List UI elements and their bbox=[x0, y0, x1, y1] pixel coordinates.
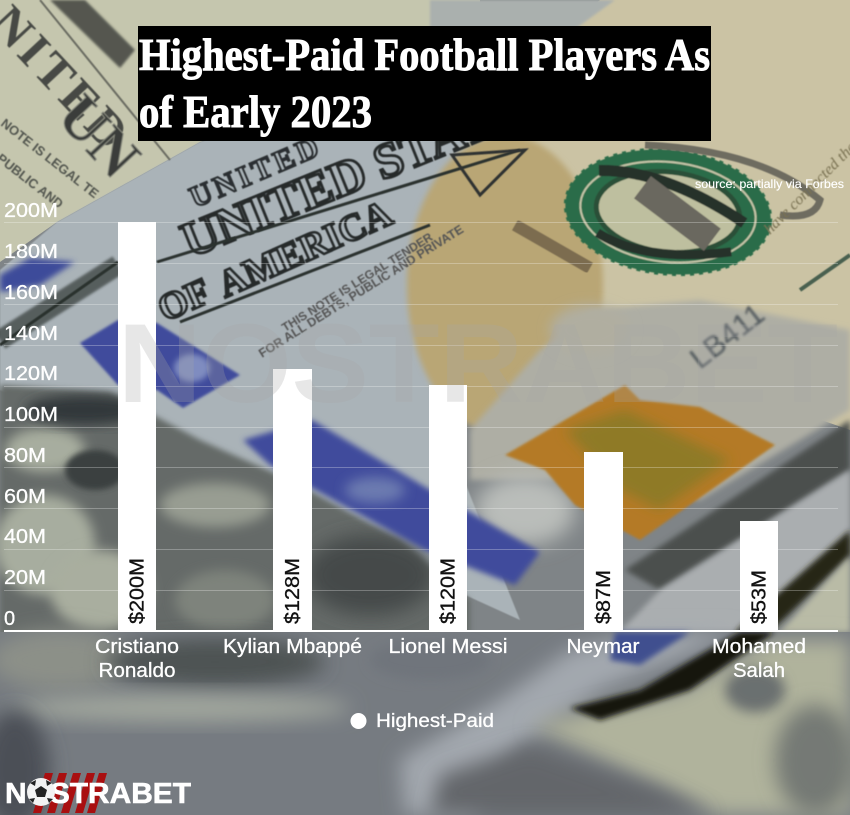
bar: Lionel Messi bbox=[429, 385, 467, 630]
mottled note right bbox=[470, 300, 850, 500]
logo red stripes bbox=[33, 773, 107, 813]
bar: Neymar bbox=[584, 452, 623, 630]
y-axis labels: 60M bbox=[4, 486, 46, 508]
bar: Lionel Messi: $120M bbox=[438, 558, 460, 624]
portrait area bbox=[0, 385, 470, 640]
grid lines bbox=[4, 222, 838, 590]
x-axis labels: Ronaldo bbox=[98, 660, 176, 682]
bar: Kylian Mbappé: $128M bbox=[282, 558, 304, 624]
orange diamond bbox=[505, 385, 775, 540]
logo: NOSTRABET: NOSTRABET bbox=[5, 778, 191, 810]
logo football icon bbox=[27, 778, 55, 806]
green treasury seal bbox=[559, 140, 777, 284]
background: blurred banknotes photo: LB411 bbox=[684, 297, 771, 376]
bar: Cristiano Ronaldo bbox=[118, 222, 156, 630]
title block: of Early 2023 bbox=[139, 87, 372, 137]
watermark: faint NOSTRABET: NOSTRABET bbox=[118, 301, 838, 426]
note lettering centre: THIS NOTE IS LEGAL TENDER bbox=[279, 230, 435, 335]
bar: Mohamed Salah bbox=[740, 521, 778, 630]
note lettering top left: UN bbox=[45, 82, 153, 190]
chart: highest-paid players bar chart bbox=[4, 200, 838, 682]
note lettering centre: UNITED bbox=[185, 129, 327, 214]
note lettering top left: NOTE IS LEGAL TE bbox=[0, 116, 102, 201]
note lettering centre: OF bbox=[152, 270, 217, 330]
lower blurred area bbox=[0, 632, 850, 815]
note lettering centre: AMERICA bbox=[212, 192, 399, 306]
y-axis labels: 100M bbox=[4, 404, 58, 426]
note lettering centre: UNITED STATES bbox=[173, 70, 557, 268]
top-left pale note bbox=[0, 0, 480, 262]
top-right tan note bbox=[430, 0, 850, 430]
y-axis labels: 40M bbox=[4, 526, 46, 548]
bar: Cristiano Ronaldo: $200M bbox=[126, 558, 148, 624]
y-axis labels: 180M bbox=[4, 241, 58, 263]
bar: Kylian Mbappé bbox=[273, 369, 312, 630]
x-axis labels bbox=[95, 636, 806, 682]
blue-grey note bbox=[0, 60, 520, 620]
x-axis line bbox=[4, 630, 838, 632]
x-axis labels: Kylian Mbappé bbox=[223, 636, 362, 658]
title block: Highest-Paid Football Players As bbox=[139, 30, 710, 80]
title block bbox=[138, 26, 711, 141]
bar: Mohamed Salah: $53M bbox=[748, 570, 770, 624]
source note: source: partially via Forbes bbox=[695, 177, 844, 191]
x-axis labels: Neymar bbox=[566, 636, 640, 658]
y-axis labels: 160M bbox=[4, 282, 58, 304]
y-axis labels: 200M bbox=[4, 200, 58, 222]
legend: Highest-Paid: Highest-Paid bbox=[376, 710, 494, 732]
y-axis labels: 0 bbox=[4, 608, 15, 630]
dark diagonal band bbox=[625, 420, 850, 590]
note lettering centre bbox=[152, 70, 557, 361]
y-axis labels: 20M bbox=[4, 567, 46, 589]
blue diamond bbox=[80, 320, 240, 408]
y-axis labels: 80M bbox=[4, 445, 46, 467]
x-axis labels: Mohamed bbox=[712, 636, 806, 658]
x-axis labels: Salah bbox=[733, 660, 785, 682]
y-axis labels: 120M bbox=[4, 363, 58, 385]
bar: Neymar: $87M bbox=[593, 570, 615, 624]
note lettering centre: FOR ALL DEBTS, PUBLIC AND PRIVATE bbox=[256, 222, 466, 361]
x-axis labels: Lionel Messi bbox=[388, 636, 508, 658]
x-axis labels: Cristiano bbox=[95, 636, 179, 658]
blue corner at left bbox=[0, 258, 75, 292]
y-axis labels bbox=[4, 200, 58, 630]
gold portrait circle bbox=[407, 135, 603, 435]
blue strip bbox=[243, 420, 540, 585]
y-axis labels: 140M bbox=[4, 323, 58, 345]
